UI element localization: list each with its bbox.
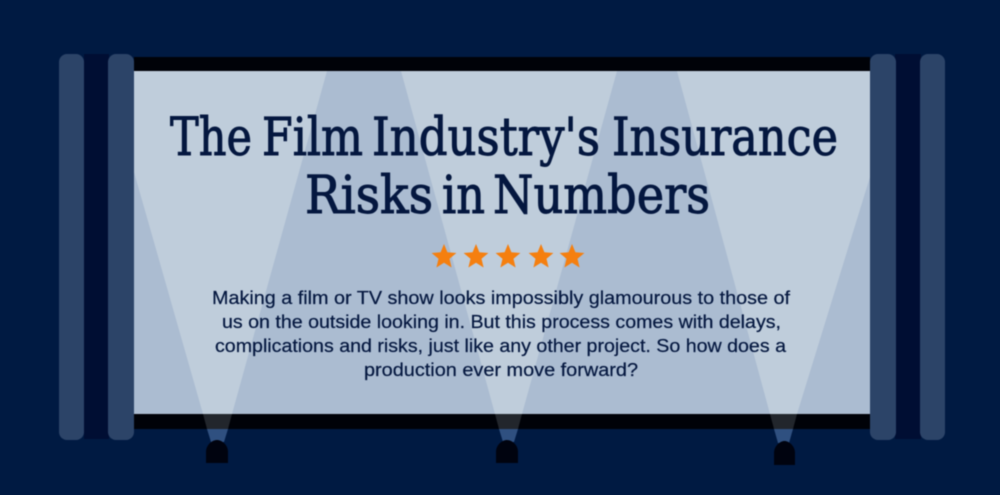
title (170, 108, 838, 226)
icon: spotlight lamp right (774, 441, 795, 465)
intro paragraph: Making a film or TV show looks impossibly glamourous to those of (212, 288, 791, 308)
right curtain (870, 54, 945, 440)
spotlight beam bases (203, 414, 797, 443)
intro paragraph (212, 288, 791, 380)
title: Risks (305, 166, 433, 226)
title: Film (262, 108, 363, 168)
icon: spotlight lamp left (206, 440, 228, 463)
title: in (442, 166, 485, 226)
top screen bar (134, 57, 870, 71)
projection screen (134, 71, 870, 414)
rating stars (432, 244, 584, 268)
title: The (170, 108, 252, 168)
title: Insurance (612, 108, 838, 168)
icon: spotlight lamp centre (496, 440, 518, 463)
title: Numbers (493, 166, 710, 226)
intro paragraph: complications and risks, just like any other project. So how does a (215, 336, 787, 356)
title: Industry's (372, 108, 600, 168)
intro paragraph: production ever move forward? (364, 360, 638, 380)
intro paragraph: us on the outside looking in. But this process comes with delays, (222, 312, 781, 332)
left curtain (59, 54, 134, 440)
bottom screen bar (134, 414, 870, 429)
